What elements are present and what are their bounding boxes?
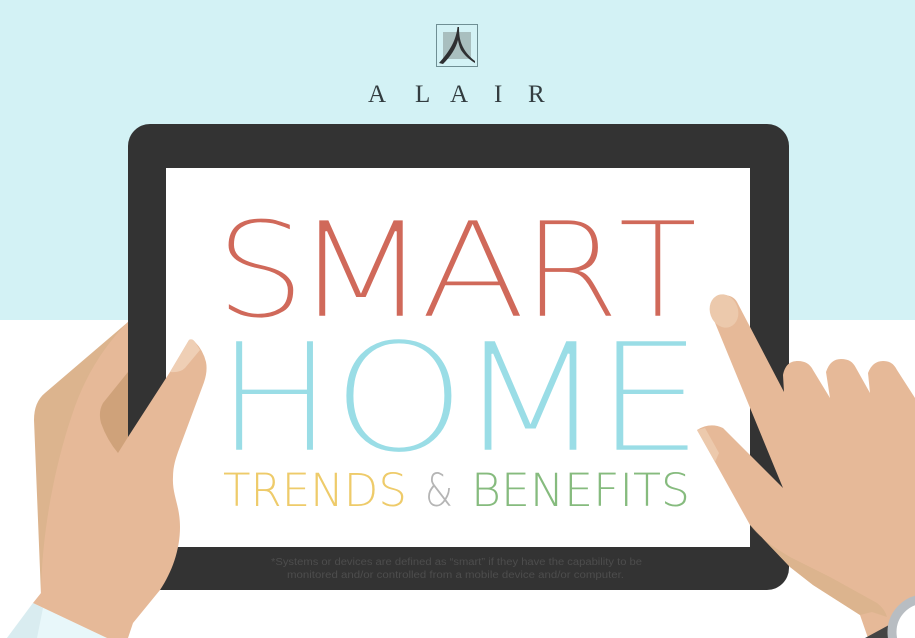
tablet [128,124,789,590]
right hand pointing at the tablet [697,290,915,638]
title: SMART: S [215,193,306,348]
index fingernail [705,290,743,332]
footnote [271,557,642,581]
tablet screen [166,168,750,547]
shirt cuff [7,603,107,638]
hand underside shadow [750,525,887,617]
watch [865,599,915,638]
title: HOME: O [332,311,466,487]
title: SMART [215,193,698,349]
title: HOME: H [216,311,333,487]
subtitle: trends and benefits [223,464,690,517]
footnote: monitored and/or controlled from a mobile device and/or computer. [287,570,624,581]
left hand holding the tablet [7,322,207,638]
logo mark [436,24,478,66]
subtitle: trends and benefits: BENEFITS [471,464,690,517]
title: HOME: M [456,311,605,487]
footnote: *Systems or devices are defined as “smart” if they have the capability to be [271,557,642,568]
title: HOME [216,311,704,487]
thumbnail [697,428,719,462]
title: SMART: T [618,194,698,349]
shadow between palm and thumb [100,372,128,453]
logo wordmark: ALAIR [368,81,545,108]
title: SMART: R [522,194,620,348]
thumbnail [170,339,200,372]
subtitle: trends and benefits: TRENDS [223,464,407,517]
subtitle: trends and benefits: & [425,464,453,517]
title: SMART: M [293,194,429,348]
title: HOME: E [594,311,704,487]
title: SMART: A [420,194,527,349]
logo: Alair [368,24,545,108]
